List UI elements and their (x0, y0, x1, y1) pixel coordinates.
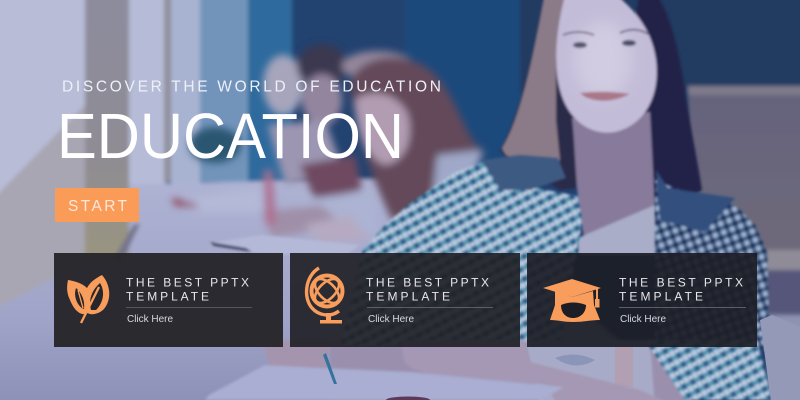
card text: THE BEST PPTX (366, 276, 489, 290)
central student (340, 0, 770, 350)
start button (55, 188, 139, 222)
card text (619, 276, 746, 325)
start button: START (68, 198, 128, 215)
card text: TEMPLATE (126, 290, 209, 304)
card text: TEMPLATE (619, 290, 703, 304)
blurred classmates (172, 44, 485, 245)
foreground: arms, paper and lower shirt (205, 315, 800, 400)
subtitle: DISCOVER THE WORLD OF EDUCATION (62, 78, 441, 96)
plaid shirt (340, 155, 770, 350)
card text: THE BEST PPTX (126, 276, 249, 290)
card text: Click Here (368, 314, 414, 325)
open book on desk (210, 235, 360, 256)
card text: TEMPLATE (366, 290, 450, 304)
icon: leaves (67, 275, 109, 323)
card text (366, 276, 493, 325)
card text: THE BEST PPTX (619, 276, 743, 290)
title: EDUCATION (57, 100, 404, 172)
card text: Click Here (127, 314, 173, 325)
icon: globe (307, 268, 343, 324)
icon: graduation cap (543, 279, 601, 322)
card text: Click Here (620, 314, 666, 325)
panel: globe card (290, 253, 520, 347)
desk (0, 178, 700, 400)
panel: graduation cap card (527, 253, 757, 347)
panel: leaf card (54, 253, 283, 347)
card text (126, 276, 252, 325)
